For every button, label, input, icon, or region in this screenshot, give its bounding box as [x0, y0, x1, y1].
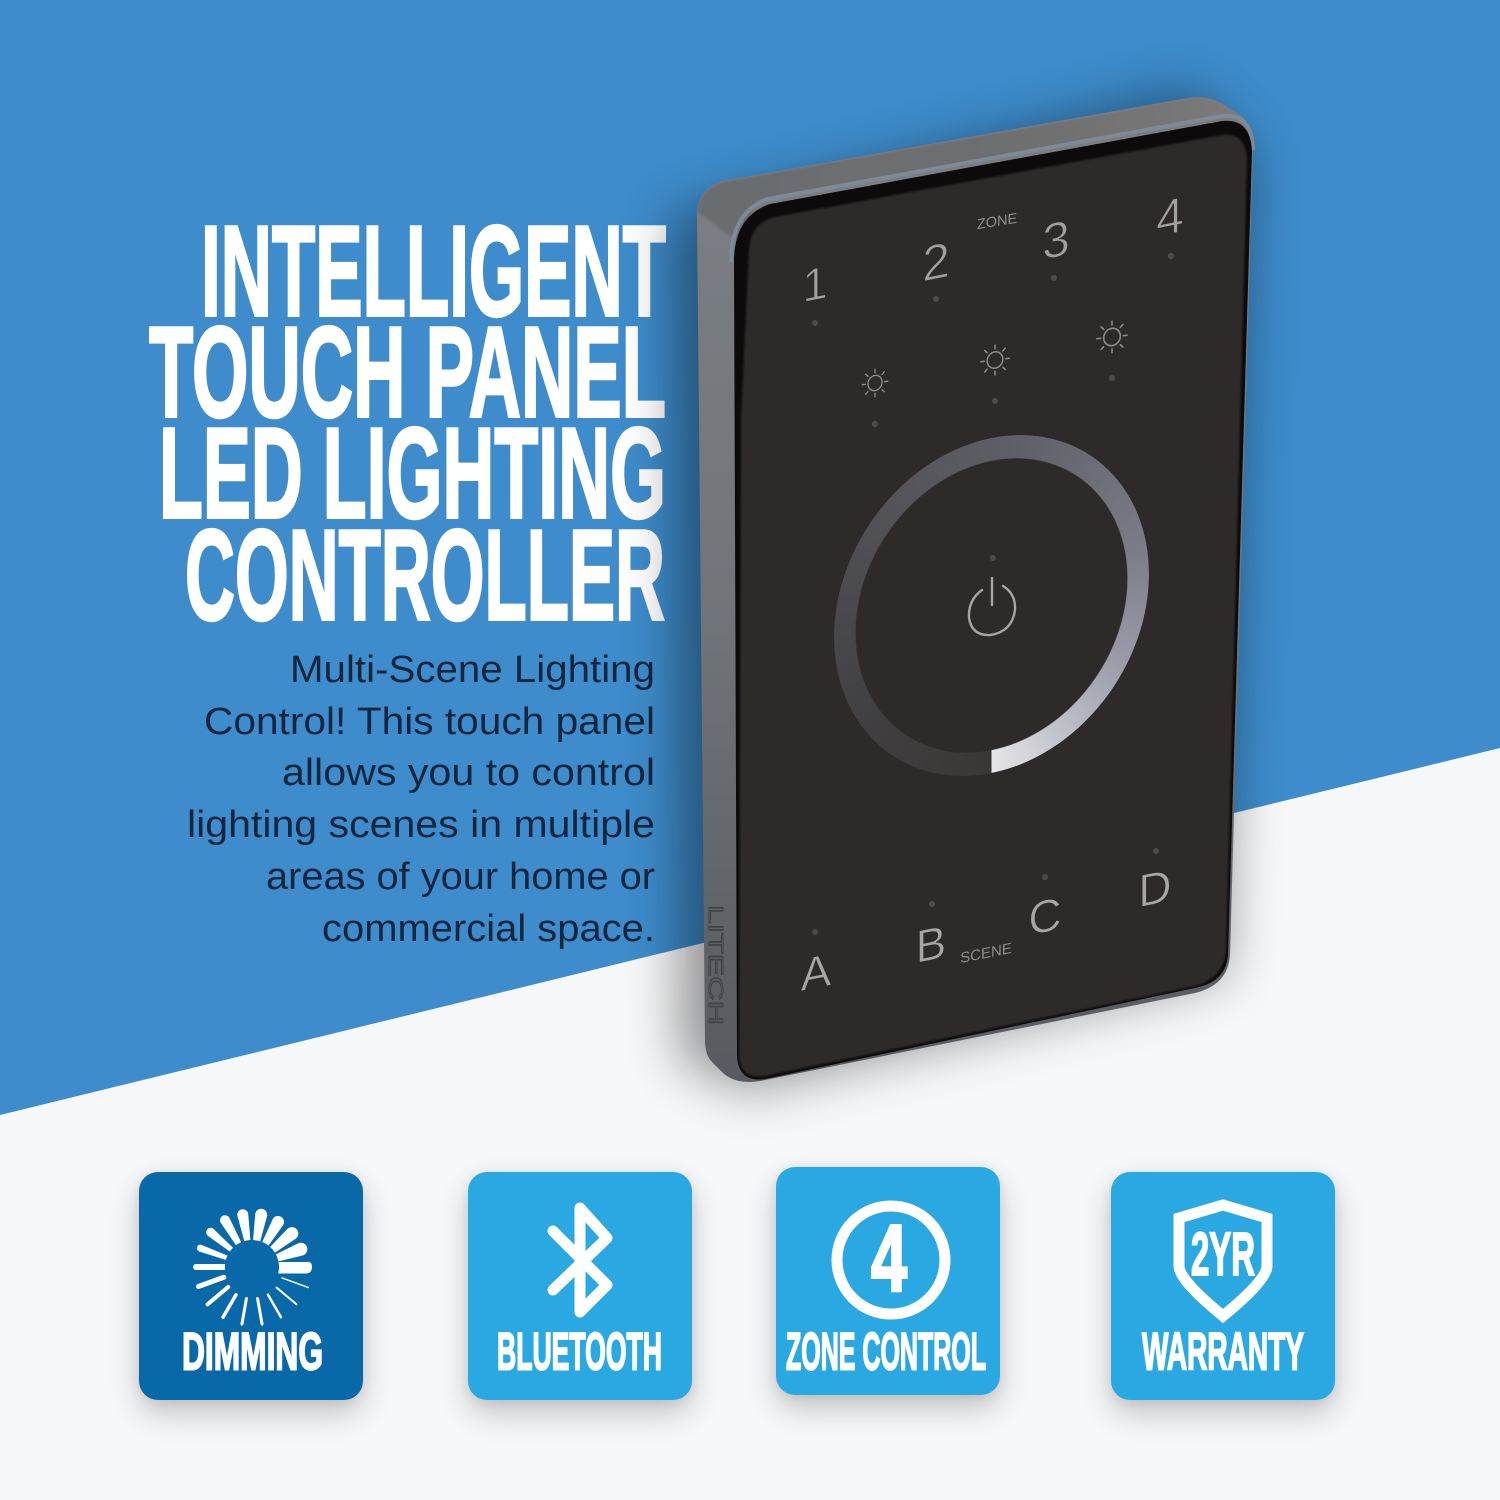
brand mark on side: LITECH	[704, 905, 726, 1025]
headline: CONTROLLER	[185, 504, 665, 648]
icon: bluetooth rune	[553, 1208, 607, 1312]
headline: LED LIGHTING	[159, 402, 666, 546]
scene labels: B	[916, 915, 946, 973]
zone labels: 3	[1042, 209, 1070, 271]
description text: commercial space.	[322, 908, 655, 950]
product shadow	[672, 90, 1250, 1090]
scene labels: C	[1028, 887, 1062, 945]
description text: Control! This touch panel	[204, 701, 655, 743]
zone labels: 4	[1156, 186, 1184, 248]
description text	[187, 649, 655, 950]
glass edge highlight	[731, 116, 1253, 262]
icons: brightness suns	[862, 320, 1127, 399]
device body side and top	[697, 97, 1253, 1082]
indicator dots	[812, 253, 1174, 935]
scene labels: A	[801, 943, 831, 1001]
background: blue diagonal panel	[0, 0, 1500, 1115]
tile: bluetooth	[468, 1172, 692, 1400]
tile: warranty	[1111, 1172, 1335, 1400]
zone labels: ZONE	[977, 211, 1017, 233]
headline: TOUCH PANEL	[149, 300, 666, 444]
headline: INTELLIGENT	[201, 200, 666, 344]
scene labels: SCENE	[960, 940, 1012, 967]
description text: areas of your home or	[266, 856, 655, 898]
icon: numeral in circle	[837, 1206, 945, 1314]
tile: zone control	[776, 1167, 1000, 1395]
description text: Multi-Scene Lighting	[290, 649, 655, 691]
icon: dimming sun	[196, 1208, 312, 1324]
matte printed face	[739, 135, 1247, 1077]
scene labels	[801, 859, 1172, 1001]
glass front	[734, 121, 1252, 1079]
description text: lighting scenes in multiple	[187, 804, 655, 846]
zone labels: 1	[802, 256, 828, 312]
icon: shield with term	[1179, 1205, 1267, 1316]
icon: shield with term: 2YR	[1191, 1220, 1255, 1288]
product: touch panel device	[697, 97, 1253, 1082]
headline	[149, 200, 666, 648]
scene labels: D	[1138, 859, 1172, 917]
description text: allows you to control	[282, 752, 655, 794]
icon: power symbol	[969, 578, 1015, 635]
tile: dimming	[139, 1172, 363, 1400]
dimmer ring	[834, 435, 1149, 776]
zone labels: 2	[922, 231, 950, 293]
icon: numeral in circle: 4	[871, 1206, 907, 1312]
zone labels	[802, 186, 1184, 312]
